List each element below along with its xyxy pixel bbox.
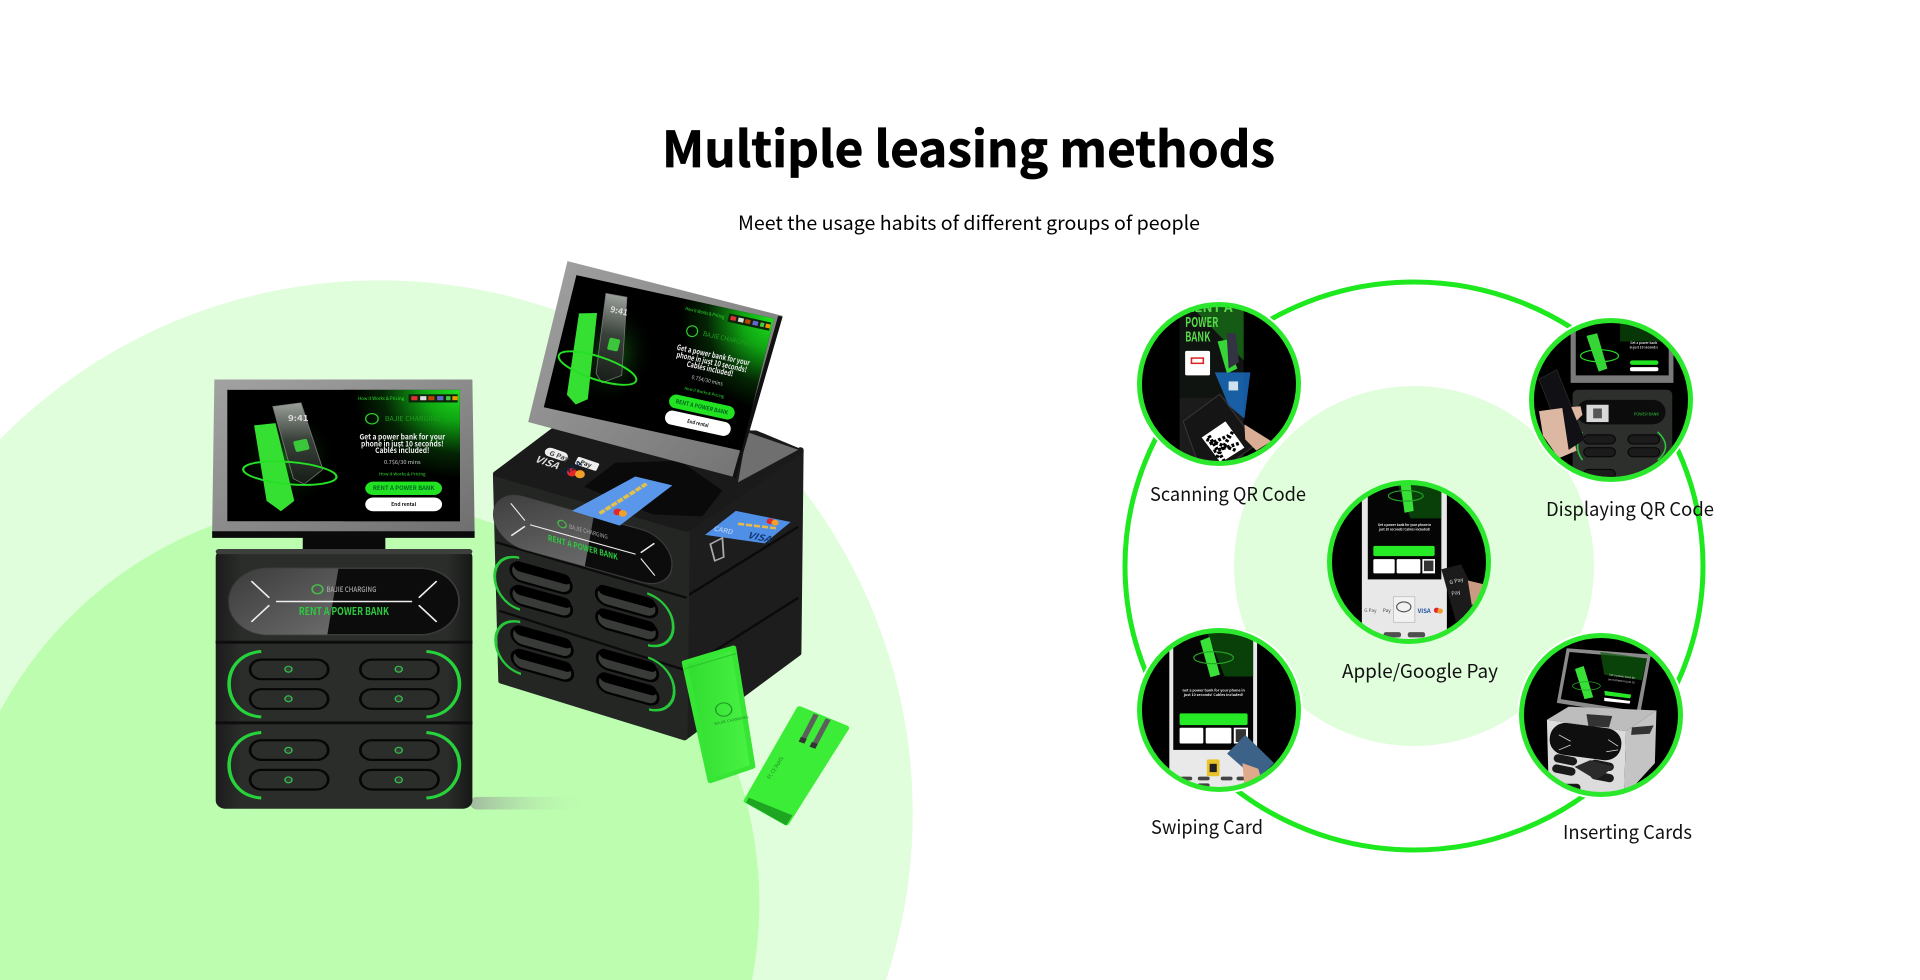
method circle: inserting cards bbox=[1517, 631, 1687, 801]
method circle: Apple / Google Pay: just 10 seconds! Cables included! bbox=[1378, 527, 1430, 531]
method circle: Apple / Google Pay bbox=[1325, 477, 1495, 648]
label: swiping card: Swiping Card bbox=[1151, 813, 1263, 840]
label: Apple/Google Pay: Apple/Google Pay bbox=[1342, 657, 1498, 684]
tilted tablet display: End rental bbox=[686, 418, 710, 429]
front face bbox=[496, 476, 687, 738]
light panel: RENT A POWER BANK bbox=[299, 604, 389, 619]
front panel and slots, in perspective bbox=[493, 488, 675, 717]
tilted tablet display: How it Works & Pricing bbox=[685, 305, 726, 321]
rental slots bbox=[511, 561, 658, 707]
light panel bbox=[493, 494, 672, 584]
light panel: BAJIE CHARGING bbox=[326, 584, 377, 595]
method circle: displaying QR code: in just 10 seconds! bbox=[1630, 344, 1658, 349]
tablet display: Get a power bank for your bbox=[359, 431, 446, 442]
center pale circle bbox=[1234, 386, 1594, 746]
power bank: back with cables: FC CE RoHS bbox=[765, 756, 786, 780]
method circle: Apple / Google Pay: G Pay bbox=[1448, 575, 1465, 586]
infographic canvas bbox=[0, 126, 1714, 980]
tablet display bbox=[227, 390, 460, 521]
tilted tablet display bbox=[544, 275, 774, 451]
tilted tablet display: 0.7$4/30 mins bbox=[691, 373, 724, 388]
tablet bezel bbox=[212, 380, 475, 532]
power bank: back with cables bbox=[746, 709, 846, 825]
tablet display: 9:41 bbox=[288, 412, 309, 424]
light panel: RENT A POWER BANK bbox=[548, 531, 618, 563]
tablet display: phone in just 10 seconds! bbox=[361, 438, 444, 449]
tablet display: BAJIE CHARGING bbox=[385, 415, 440, 424]
tablet display: How it Works & Pricing bbox=[379, 471, 426, 477]
light panel: BAJIE CHARGING bbox=[569, 521, 608, 541]
subtitle: Meet the usage habits of different groups of people bbox=[738, 207, 1200, 236]
title: Multiple leasing methods bbox=[662, 111, 1275, 182]
leasing method diagram bbox=[1125, 282, 1714, 850]
method circle: displaying QR code: Get a power bank bbox=[1630, 340, 1657, 345]
tilted tablet display: 9:41 bbox=[609, 303, 629, 319]
payment logos on top: Pay bbox=[579, 458, 594, 469]
tilted tablet display: Get a power bank for your bbox=[676, 342, 752, 369]
method circle: Apple / Google Pay: VISA bbox=[1417, 606, 1431, 615]
green glow arcs bbox=[494, 551, 675, 717]
tilted tablet display: phone in just 10 seconds! bbox=[675, 349, 748, 375]
tilted tablet display: BAJIE CHARGING bbox=[702, 328, 752, 348]
tablet display: Cables included! bbox=[375, 445, 430, 456]
top face bbox=[496, 429, 800, 529]
top card being tapped: VISA bbox=[557, 458, 584, 478]
method circle: Apple / Google Pay: Pay bbox=[1383, 608, 1391, 614]
label: inserting cards: Inserting Cards bbox=[1563, 818, 1692, 845]
side QR notice bbox=[710, 538, 724, 561]
background circle: pale green bbox=[0, 280, 913, 980]
method circle: swiping card: Get a power bank for your phone in bbox=[1182, 688, 1245, 693]
side face bbox=[684, 450, 800, 738]
method circle: scanning QR code: BANK bbox=[1185, 327, 1211, 346]
method circle: Apple / Google Pay: Pay bbox=[1450, 588, 1462, 597]
tablet display: RENT A POWER BANK bbox=[373, 484, 435, 492]
side card being inserted: CARD bbox=[713, 524, 734, 537]
side card being inserted bbox=[705, 511, 791, 545]
slot indicator lights bbox=[285, 666, 402, 783]
tilted tablet display: How it Works & Pricing bbox=[684, 385, 725, 400]
slot top shadows bbox=[513, 560, 657, 697]
payment logos on top: VISA bbox=[533, 452, 562, 472]
product photo: charging stations and power banks bbox=[212, 261, 846, 825]
tilted tablet bezel bbox=[528, 261, 783, 478]
tablet display: End rental bbox=[391, 501, 416, 508]
method circle: inserting cards: your phone in just 10 bbox=[1608, 677, 1635, 685]
power bank: front: BAJIE CHARGING bbox=[714, 714, 750, 727]
side card being inserted: VISA bbox=[746, 528, 774, 545]
light panel bbox=[229, 568, 459, 635]
station: upright front view bbox=[212, 380, 475, 809]
method circle: scanning QR code bbox=[1135, 298, 1305, 470]
background circle: mid green bbox=[0, 499, 759, 980]
method circle: inserting cards: Get a power bank for bbox=[1609, 673, 1637, 680]
green glow arcs bbox=[229, 651, 459, 798]
rental slots bbox=[250, 660, 438, 789]
method circle: scanning QR code: POWER bbox=[1185, 313, 1219, 332]
floor shadow bbox=[470, 797, 591, 809]
method circle: displaying QR code: POWER BANK bbox=[1634, 412, 1659, 417]
station: angled view with card readers bbox=[493, 261, 800, 738]
payment logos on top bbox=[533, 446, 600, 478]
method circle: displaying QR code bbox=[1527, 316, 1697, 486]
method circle: Apple / Google Pay: Get a power bank for your phone in bbox=[1378, 522, 1431, 527]
tablet display: How it Works & Pricing bbox=[358, 396, 404, 402]
tilted tablet display: RENT A POWER BANK bbox=[675, 396, 729, 417]
method circle: swiping card: just 10 seconds! Cables included! bbox=[1183, 692, 1243, 697]
payment logos on top: G Pay bbox=[548, 449, 571, 464]
tablet display: 0.7$6/30 mins bbox=[384, 458, 421, 466]
power bank: front bbox=[684, 648, 753, 781]
station body bbox=[216, 549, 472, 809]
top card being tapped bbox=[557, 458, 672, 526]
label: displaying QR code: Displaying QR Code bbox=[1546, 495, 1714, 522]
method circle: scanning QR code: RENT A bbox=[1185, 298, 1233, 316]
method circle: swiping card bbox=[1135, 626, 1305, 797]
tilted tablet display: Cables included! bbox=[686, 359, 735, 379]
method circle: Apple / Google Pay: G Pay bbox=[1364, 608, 1377, 614]
label: scanning QR code: Scanning QR Code bbox=[1150, 480, 1306, 507]
outer green ring bbox=[1125, 282, 1703, 850]
stand bbox=[303, 537, 385, 557]
